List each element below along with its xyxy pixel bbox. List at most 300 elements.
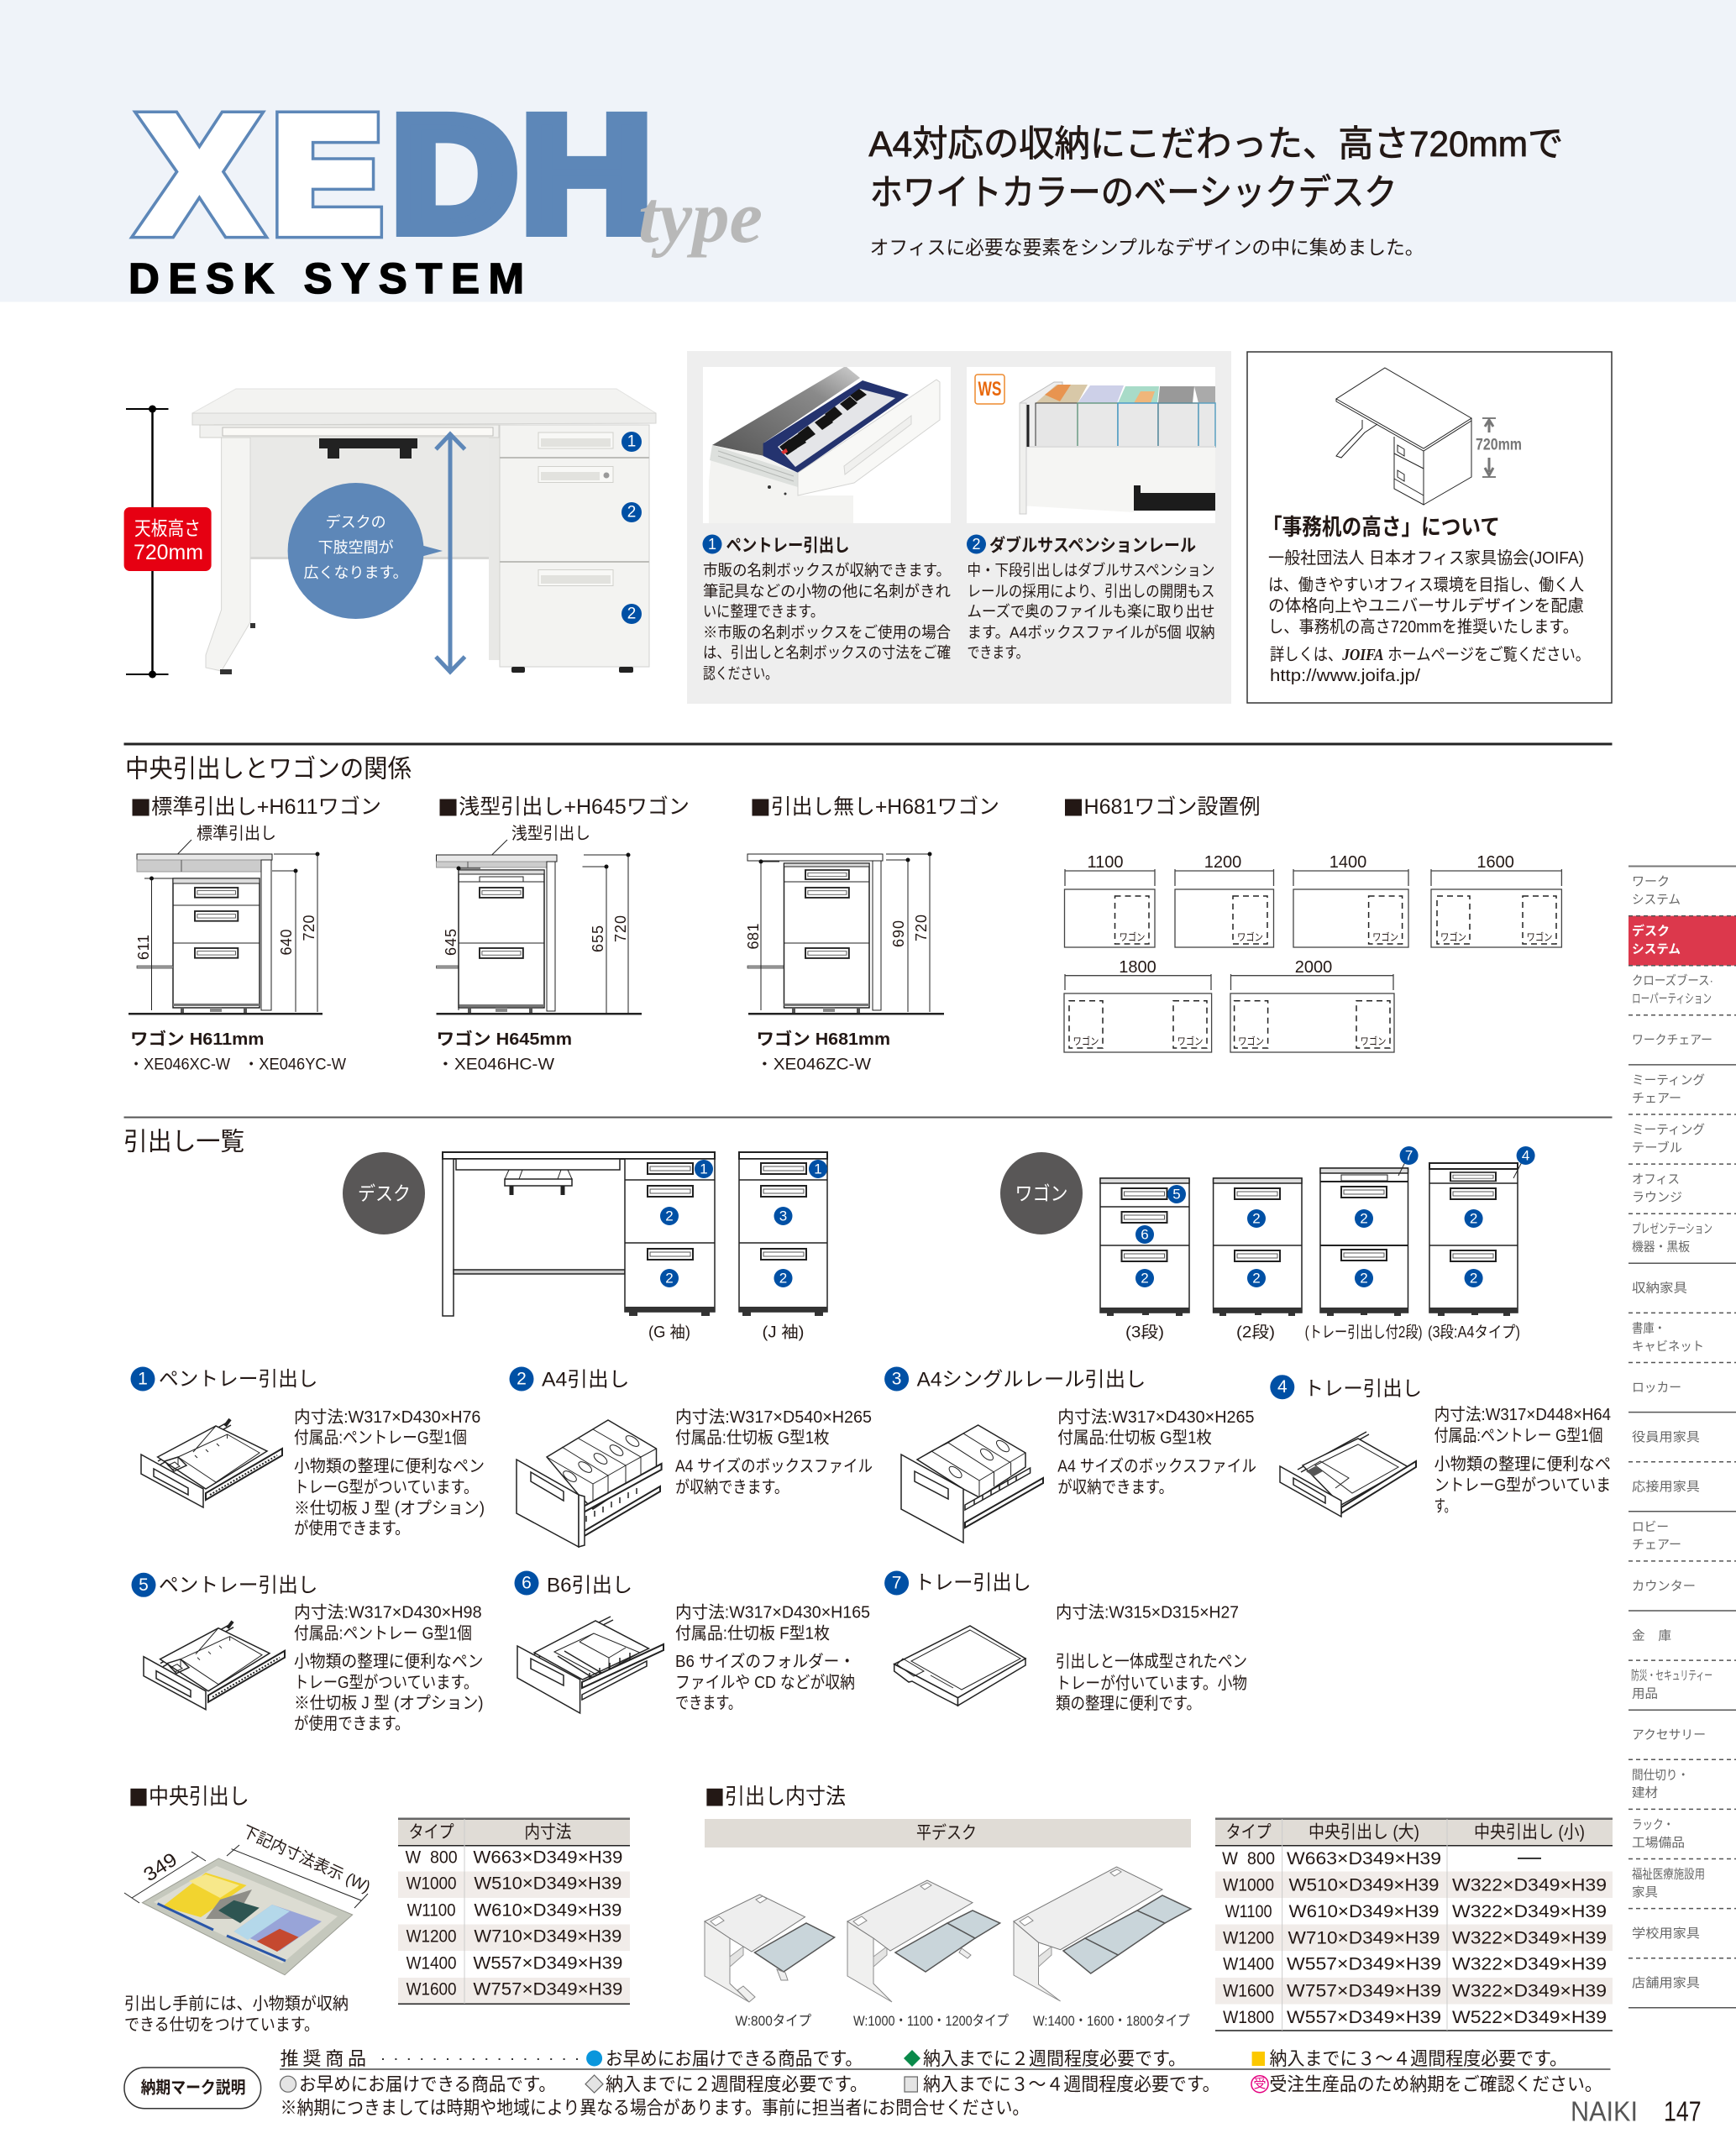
- desk photo badges: 1: [627, 433, 636, 450]
- feature 2: double suspension rail text: ムーズで奥のファイルも楽に取り出せ: [968, 603, 1214, 620]
- badge: WS: [975, 375, 1004, 404]
- table: center drawer inner dimensions: W1200: [406, 1926, 457, 1947]
- table: flat desk inner dimensions: W322×D349×H39: [1452, 1982, 1607, 2000]
- diagram: H681 wagon layout examples: 1100: [1087, 853, 1124, 872]
- feature 1: pen tray text: 1: [708, 536, 716, 553]
- body text: JOIFA: の体格向上やユニバーサルデザインを配慮: [1268, 596, 1584, 616]
- drawer 5: pen tray: 付属品:ペントレー G型1個: [294, 1624, 472, 1643]
- body text: JOIFA: 詳しくは、JOIFA ホームページをご覧ください。: [1270, 645, 1590, 664]
- table: flat desk inner dimensions: W557×D349×H39: [1287, 2008, 1441, 2027]
- footer: page number: 147: [1664, 2096, 1702, 2126]
- desk elevation: J pedestal: 2: [779, 1270, 787, 1287]
- sidebar: category index: ワークチェアー: [1632, 1033, 1712, 1047]
- feature 1: pen tray text: ※市販の名刺ボックスをご使用の場合: [703, 623, 951, 642]
- feature 1: pen tray text: 市販の名刺ボックスが収納できます。: [703, 561, 951, 579]
- sidebar: category index: システム: [1632, 893, 1681, 907]
- drawer 3: A4 single rail: [884, 1367, 1256, 1543]
- label: desk: [343, 1152, 425, 1234]
- subheadings: [130, 792, 1260, 822]
- diagram: H681 wagon layout examples: ワゴン: [1361, 1035, 1386, 1047]
- diagram: H681 wagon layout examples: 1800: [1119, 958, 1156, 977]
- drawer 6: B6: B6 サイズのフォルダー・: [675, 1652, 855, 1671]
- feature 1: pen tray text: いに整理できます。: [703, 603, 824, 620]
- drawer 1: pen tray: トレーG型がついています。: [294, 1478, 478, 1497]
- sidebar: category index: チェアー: [1632, 1091, 1681, 1105]
- diagram: standard drawer + H611 wagon: 標準引出し: [197, 824, 276, 843]
- table: center drawer inner dimensions: W 800: [406, 1848, 458, 1868]
- icon: pen tray drawer: [141, 1419, 282, 1507]
- drawer 1: pen tray: ペントレー引出し: [159, 1368, 317, 1391]
- sidebar: category index: 店舗用家具: [1632, 1976, 1700, 1990]
- sidebar: category index: 書庫・: [1632, 1321, 1665, 1335]
- subheadings: ■H681ワゴン設置例: [1063, 792, 1260, 822]
- dimension: desk height: [124, 405, 212, 679]
- callout bubble: legroom: 広くなります。: [303, 564, 408, 581]
- diagram: shallow drawer + H645 wagon: 645: [443, 929, 459, 956]
- table: flat desk inner dimensions: W510×D349×H39: [1288, 1876, 1440, 1895]
- diagram: H681 wagon layout examples: ワゴン: [1440, 930, 1466, 943]
- subheadings: ■引出し無し+H681ワゴン: [750, 792, 999, 822]
- desk photo badges: 2: [627, 605, 636, 623]
- diagram: H681 wagon layout examples: 1400: [1330, 853, 1366, 872]
- body text: JOIFA: [1268, 548, 1590, 685]
- icon: pen tray drawer: [144, 1622, 285, 1710]
- sidebar: category index: ワーク: [1632, 874, 1670, 888]
- drawer 4: tray: [1270, 1375, 1611, 1517]
- feature 1: pen tray text: 認ください。: [703, 665, 778, 682]
- sidebar: category index: ロッカー: [1632, 1381, 1681, 1395]
- diagram: H681 wagon layout examples: ワゴン: [1177, 1035, 1203, 1047]
- table: flat desk inner dimensions: W1800: [1223, 2008, 1274, 2027]
- title logo: XEDH type: type: [638, 177, 763, 259]
- panel: desk height explanation: [1247, 352, 1612, 703]
- heading: center drawer: ■中央引出し: [128, 1780, 249, 1812]
- wagon: 3 tier A4 type: [1428, 1146, 1535, 1342]
- band: flat desk: [705, 1819, 1191, 1848]
- feature 2: double suspension rail text: ダブルサスペンションレール: [989, 536, 1196, 556]
- icon: isometric desk with 720mm height: 720mm: [1476, 437, 1522, 453]
- wagon: 3 tier A4 type: 2: [1470, 1211, 1477, 1226]
- delivery mark label: 納期マーク説明: [141, 2078, 245, 2098]
- desk elevation: G pedestal: 2: [665, 1270, 674, 1287]
- drawer 3: A4 single rail: 3: [892, 1369, 901, 1389]
- table: flat desk inner dimensions: W663×D349×H39: [1287, 1849, 1441, 1869]
- table: flat desk inner dimensions: W322×D349×H39: [1452, 1955, 1607, 1973]
- caption: wagon H611: [128, 1029, 346, 1073]
- sidebar: category index: 用品: [1632, 1687, 1658, 1701]
- sidebar: category index: 応接用家具: [1632, 1480, 1700, 1494]
- caption: wagon H681: ・XE046ZC-W: [756, 1056, 871, 1073]
- icon: A4 single rail drawer: [901, 1425, 1043, 1543]
- body text: JOIFA: は、働きやすいオフィス環境を目指し、働く人: [1268, 575, 1584, 595]
- drawer 1: pen tray: が使用できます。: [294, 1519, 410, 1538]
- table: center drawer inner dimensions: 内寸法: [524, 1822, 571, 1842]
- diagram: shallow drawer + H645 wagon: 720: [612, 915, 629, 942]
- icon: integrated tray: [894, 1626, 1025, 1706]
- desk elevation: J pedestal: [739, 1152, 827, 1342]
- feature 1: pen tray text: 筆記具などの小物の他に名刺がきれ: [703, 583, 951, 600]
- diagram: standard drawer + H611 wagon: 640: [278, 929, 295, 956]
- delivery legend: 納入までに３～４週間程度必要です。: [1270, 2048, 1567, 2069]
- diagram: H681 wagon layout examples: 1200: [1204, 853, 1241, 872]
- label: desk: デスク: [358, 1182, 411, 1204]
- sidebar: category index: カウンター: [1632, 1579, 1696, 1593]
- delivery legend: ※納期につきましては時期や地域により異なる場合があります。事前に担当者にお問合せください。: [281, 2098, 1029, 2118]
- table: flat desk inner dimensions: W 800: [1222, 1849, 1275, 1869]
- wagon: 2 tier: 2: [1252, 1211, 1261, 1226]
- table: flat desk inner dimensions: W322×D349×H39: [1452, 1902, 1607, 1921]
- table: center drawer inner dimensions: W1100: [407, 1901, 456, 1920]
- sidebar: category index: 収納家具: [1632, 1282, 1687, 1296]
- header headline: ホワイトカラーのベーシックデスク: [870, 173, 1398, 213]
- red label: desk top height: [124, 507, 212, 571]
- table: flat desk inner dimensions: W322×D349×H39: [1452, 1928, 1607, 1948]
- sidebar: category index: ラック・: [1632, 1817, 1674, 1832]
- drawer 6: B6: 6: [522, 1574, 532, 1592]
- drawer 4: tray: す。: [1434, 1497, 1455, 1516]
- drawer 7: tray: トレーが付いています。小物: [1056, 1674, 1247, 1693]
- diagram: H681 wagon layout examples: ワゴン: [1527, 930, 1552, 943]
- drawer 2: A4: 内寸法:W317×D540×H265: [675, 1407, 872, 1427]
- red label: desk top height: 720mm: [134, 541, 203, 564]
- drawer 5: pen tray: ペントレー引出し: [159, 1574, 317, 1597]
- sidebar: category index: オフィス: [1632, 1172, 1680, 1187]
- sidebar: category index: 機器・黒板: [1632, 1240, 1690, 1255]
- sidebar: category index: 工場備品: [1632, 1836, 1685, 1850]
- heading: about desk height: 「事務机の高さ」について: [1262, 515, 1500, 540]
- sidebar: category index: 学校用家具: [1632, 1926, 1700, 1941]
- photo: center drawer tray: 349: [139, 1848, 181, 1885]
- table: flat desk inner dimensions: W1600: [1223, 1982, 1274, 2000]
- caption: wagon H645: [437, 1029, 572, 1073]
- caption: wagon H645: ・XE046HC-W: [437, 1056, 554, 1073]
- table: flat desk inner dimensions: W1000: [1223, 1876, 1274, 1895]
- feature 1: pen tray text: [702, 534, 951, 682]
- panel: drawer features: [687, 351, 1231, 704]
- sidebar: category index: テーブル: [1632, 1140, 1682, 1155]
- wagon: 2 tier: (2段): [1236, 1323, 1275, 1342]
- wagon: 3 tier A4 type: (3段:A4タイプ): [1428, 1323, 1520, 1342]
- drawer 6: B6: B6引出し: [547, 1574, 632, 1597]
- feature 2: double suspension rail text: ます。A4ボックスファイルが5個 収納: [968, 623, 1214, 642]
- desk elevation: G pedestal: 2: [665, 1208, 674, 1224]
- desk illustration: W800: W:800タイプ: [736, 2013, 811, 2029]
- footer: brand: NAIKI: [1571, 2096, 1638, 2126]
- wagon: with tray, 2 tier: 2: [1360, 1211, 1368, 1226]
- desk illustration: W1000/1100/1200: W:1000・1100・1200タイプ: [853, 2013, 1009, 2029]
- diagram: shallow drawer + H645 wagon: 浅型引出し: [511, 824, 590, 843]
- delivery mark label: [124, 2068, 261, 2109]
- wagon: 2 tier: 2: [1252, 1270, 1261, 1287]
- drawer 6: B6: [514, 1570, 870, 1713]
- diagram: H681 wagon layout examples: 1600: [1476, 853, 1514, 872]
- table: center drawer inner dimensions: W610×D349×H39: [474, 1901, 621, 1920]
- section heading: center drawer and wagon relation: 中央引出しとワゴンの関係: [125, 756, 412, 783]
- feature 2: double suspension rail text: レールの採用により、引出しの開閉もス: [968, 583, 1214, 600]
- drawer 5: pen tray: ※仕切板 J 型 (オプション): [294, 1694, 484, 1713]
- sidebar: category index: ミーティング: [1632, 1073, 1705, 1088]
- drawer 5: pen tray: が使用できます。: [294, 1714, 410, 1733]
- diagram: shallow drawer + H645 wagon: [437, 824, 642, 1073]
- band: flat desk: 平デスク: [916, 1824, 977, 1842]
- diagram: no drawer + H681 wagon: [745, 852, 944, 1073]
- photo: center drawer tray: 下記内寸法表示 (W): [239, 1822, 373, 1896]
- callout bubble: legroom: 下肢空間が: [318, 539, 394, 556]
- drawer 7: tray: 類の整理に便利です。: [1056, 1694, 1201, 1713]
- body text: JOIFA: し、事務机の高さ720mmを推奨いたします。: [1268, 617, 1578, 637]
- sidebar: category index: 家具: [1632, 1885, 1658, 1900]
- drawer 1: pen tray: [131, 1367, 485, 1538]
- drawer 2: A4: A4 サイズのボックスファイル: [675, 1457, 873, 1476]
- drawer 2: A4: A4引出し: [542, 1369, 630, 1391]
- drawer 1: pen tray: 小物類の整理に便利なペン: [294, 1457, 485, 1476]
- sidebar: category index: [1628, 867, 1736, 2008]
- table: center drawer inner dimensions: W1400: [406, 1953, 457, 1973]
- desk elevation: G pedestal: [443, 1152, 715, 1342]
- sidebar: category index: クローズブース·: [1632, 973, 1713, 988]
- diagram: H681 wagon layout examples: ワゴン: [1119, 930, 1146, 943]
- drawer 4: tray: 付属品:ペントレー G型1個: [1434, 1426, 1602, 1445]
- drawer 7: tray: 7: [892, 1574, 901, 1592]
- body text: JOIFA: 一般社団法人 日本オフィス家具協会(JOIFA): [1268, 548, 1584, 568]
- delivery legend: お早めにお届けできる商品です。: [606, 2048, 863, 2069]
- icon: tray drawer: [1280, 1432, 1416, 1517]
- photo: center drawer tray: [124, 1822, 373, 1975]
- desk elevation: G pedestal: 1: [700, 1161, 708, 1177]
- drawer 4: tray: 4: [1277, 1377, 1288, 1397]
- sidebar: category index: 間仕切り・: [1632, 1768, 1689, 1782]
- drawer 5: pen tray: [131, 1573, 484, 1733]
- diagram: H681 wagon layout examples: 2000: [1295, 958, 1332, 977]
- drawer 4: tray: 内寸法:W317×D448×H64: [1434, 1405, 1611, 1424]
- label: wagon: [1000, 1152, 1083, 1234]
- title logo: XEDH type: H: [522, 84, 652, 265]
- desk illustration: W1000/1100/1200: [847, 1880, 1009, 2029]
- wagon: with tray, 2 tier: [1305, 1146, 1423, 1342]
- caption: center drawer: できる仕切をつけています。: [124, 2015, 319, 2035]
- diagram: H681 wagon layout examples: [1064, 853, 1561, 1052]
- drawer 1: pen tray: 付属品:ペントレーG型1個: [294, 1428, 467, 1448]
- sidebar: category index: ロビー: [1632, 1520, 1669, 1534]
- desk elevation: J pedestal: (J 袖): [763, 1323, 805, 1342]
- feature 2: double suspension rail text: [967, 534, 1214, 662]
- table: flat desk inner dimensions: W322×D349×H39: [1452, 1876, 1607, 1895]
- icon: A4 drawer with dividers: [517, 1420, 662, 1547]
- caption: wagon H645: ワゴン H645mm: [437, 1029, 572, 1049]
- wagon: 3 tier: (3段): [1125, 1323, 1164, 1342]
- desk illustration: W1400/1600/1800: W:1400・1600・1800タイプ: [1033, 2013, 1190, 2029]
- delivery legend: 受: [1253, 2077, 1267, 2091]
- drawer 3: A4 single rail: A4 サイズのボックスファイル: [1057, 1457, 1256, 1476]
- sidebar: category index: 建材: [1632, 1786, 1658, 1800]
- header description: オフィスに必要な要素をシンプルなデザインの中に集めました。: [870, 237, 1424, 259]
- caption: center drawer: 引出し手前には、小物類が収納: [124, 1994, 349, 2014]
- drawer 3: A4 single rail: A4シングルレール引出し: [917, 1369, 1146, 1391]
- diagram: no drawer + H681 wagon: 681: [745, 924, 762, 949]
- delivery legend: 納入までに３～４週間程度必要です。: [923, 2074, 1220, 2094]
- drawer 3: A4 single rail: 付属品:仕切板 G型1枚: [1057, 1428, 1212, 1448]
- section divider: [124, 742, 1613, 746]
- header headline: A4対応の収納にこだわった、高さ720mmで: [868, 124, 1563, 165]
- feature 2: double suspension rail text: 中・下段引出しはダブルサスペンション: [968, 561, 1214, 579]
- icon: isometric desk with 720mm height: [1336, 368, 1522, 505]
- badge: WS: WS: [978, 378, 1001, 401]
- drawer 6: B6: ファイルや CD などが収納: [675, 1673, 855, 1692]
- diagram: standard drawer + H611 wagon: 720: [301, 915, 317, 941]
- diagram: H681 wagon layout examples: ワゴン: [1238, 1035, 1264, 1047]
- sidebar: category index: 金 庫: [1632, 1628, 1671, 1643]
- desk illustration: W800: [705, 1895, 835, 2029]
- delivery legend: [280, 2048, 1611, 2118]
- table: center drawer inner dimensions: タイプ: [409, 1822, 454, 1842]
- section divider: [124, 1117, 1613, 1119]
- desk elevation: G pedestal: (G 袖): [648, 1323, 690, 1342]
- delivery legend: 推奨商品: [281, 2048, 366, 2069]
- caption: wagon H681: ワゴン H681mm: [756, 1029, 890, 1049]
- sidebar: category index: 役員用家具: [1632, 1430, 1700, 1444]
- title logo: XEDH type: E: [272, 82, 382, 266]
- drawer 7: tray: [884, 1570, 1247, 1713]
- drawer 4: tray: 小物類の整理に便利なペ: [1434, 1455, 1611, 1474]
- diagram: no drawer + H681 wagon: 720: [913, 915, 930, 941]
- red label: desk top height: 天板高さ: [134, 517, 201, 539]
- drawer 2: A4: 付属品:仕切板 G型1枚: [675, 1428, 830, 1448]
- table: flat desk inner dimensions: W610×D349×H39: [1288, 1902, 1440, 1921]
- sidebar: category index: アクセサリー: [1632, 1728, 1706, 1743]
- table: flat desk inner dimensions: タイプ: [1226, 1822, 1272, 1842]
- callout bubble: legroom: [288, 483, 443, 619]
- subheadings: ■浅型引出し+H645ワゴン: [438, 792, 690, 822]
- delivery legend: お早めにお届けできる商品です。: [299, 2074, 556, 2094]
- title logo: XEDH type: X: [142, 83, 257, 266]
- delivery legend: 受注生産品のため納期をご確認ください。: [1270, 2074, 1602, 2094]
- drawer 4: tray: ントレーG型がついていま: [1434, 1475, 1611, 1495]
- drawer 6: B6: 内寸法:W317×D430×H165: [675, 1603, 870, 1622]
- drawer 1: pen tray: 内寸法:W317×D430×H76: [294, 1407, 480, 1427]
- table: center drawer inner dimensions: [398, 1817, 630, 2005]
- diagram: H681 wagon layout examples: ワゴン: [1372, 930, 1398, 943]
- feature 2: double suspension rail text: できます。: [968, 643, 1028, 662]
- table: center drawer inner dimensions: W510×D349×H39: [474, 1874, 621, 1893]
- table: center drawer inner dimensions: W1000: [406, 1874, 457, 1893]
- feature 2: double suspension rail text: 2: [972, 536, 981, 553]
- delivery legend: 納入までに２週間程度必要です。: [923, 2048, 1186, 2069]
- desk illustration: W1400/1600/1800: [1014, 1867, 1191, 2029]
- table: flat desk inner dimensions: 中央引出し (大): [1309, 1822, 1419, 1842]
- icon: B6 drawer: [517, 1617, 663, 1713]
- sidebar: category index: システム: [1632, 942, 1681, 957]
- table: flat desk inner dimensions: W1400: [1223, 1955, 1274, 1973]
- table: flat desk inner dimensions: [1215, 1817, 1613, 2031]
- drawer 3: A4 single rail: 内寸法:W317×D430×H265: [1057, 1407, 1255, 1427]
- wagon: with tray, 2 tier: (トレー引出し付2段): [1305, 1323, 1423, 1342]
- wagon: with tray, 2 tier: 7: [1405, 1147, 1413, 1164]
- table: flat desk inner dimensions: W1100: [1225, 1902, 1272, 1921]
- desk photo: [192, 389, 656, 674]
- diagram: standard drawer + H611 wagon: [128, 824, 346, 1073]
- feature 1: pen tray text: ペントレー引出し: [726, 536, 850, 556]
- header headline: [868, 124, 1563, 213]
- diagram: shallow drawer + H645 wagon: 655: [590, 925, 606, 952]
- drawer 7: tray: 内寸法:W315×D315×H27: [1056, 1603, 1239, 1622]
- desk photo badges: 2: [627, 504, 636, 521]
- drawer 6: B6: 付属品:仕切板 F型1枚: [675, 1624, 830, 1643]
- wagon: with tray, 2 tier: 2: [1360, 1270, 1368, 1287]
- table: center drawer inner dimensions: W557×D349×H39: [473, 1953, 622, 1973]
- table: center drawer inner dimensions: W1600: [406, 1980, 457, 1999]
- desk elevation: J pedestal: 1: [814, 1161, 822, 1177]
- photo: double suspension rail drawer: [967, 367, 1215, 523]
- wagon: 2 tier: [1214, 1178, 1302, 1342]
- drawer 2: A4: が収納できます。: [675, 1478, 789, 1497]
- table: center drawer inner dimensions: W710×D349×H39: [474, 1926, 621, 1947]
- drawer 5: pen tray: 内寸法:W317×D430×H98: [294, 1603, 482, 1622]
- table: flat desk inner dimensions: W557×D349×H39: [1287, 1955, 1441, 1973]
- drawer 7: tray: 引出しと一体成型されたペン: [1056, 1652, 1247, 1671]
- caption: wagon H681: [756, 1029, 890, 1073]
- drawer 2: A4: 2: [517, 1369, 527, 1389]
- caption: wagon H611: ・XE046XC-W: [128, 1056, 230, 1073]
- subtitle: DESK SYSTEM: DESK SYSTEM: [128, 254, 524, 302]
- caption: center drawer: [124, 1994, 349, 2035]
- sidebar: category index: 福祉医療施設用: [1632, 1867, 1705, 1881]
- sidebar: category index: チェアー: [1632, 1538, 1681, 1552]
- drawer 3: A4 single rail: が収納できます。: [1057, 1478, 1173, 1497]
- drawer 4: tray: トレー引出し: [1304, 1377, 1422, 1401]
- drawer 2: A4: [509, 1367, 873, 1547]
- table: flat desk inner dimensions: 中央引出し (小): [1474, 1822, 1585, 1842]
- callout bubble: legroom: デスクの: [326, 514, 386, 531]
- table: flat desk inner dimensions: W757×D349×H39: [1287, 1982, 1441, 2000]
- table: flat desk inner dimensions: W1200: [1223, 1928, 1274, 1948]
- wagon: 3 tier: 6: [1141, 1226, 1149, 1243]
- diagram: no drawer + H681 wagon: 690: [890, 920, 907, 947]
- wagon: 3 tier: 5: [1172, 1186, 1181, 1203]
- sidebar: category index: ミーティング: [1632, 1123, 1705, 1137]
- photo: pen tray drawer: [703, 367, 951, 523]
- table: center drawer inner dimensions: W663×D349×H39: [473, 1848, 622, 1868]
- drawer 5: pen tray: トレーG型がついています。: [294, 1673, 478, 1692]
- legroom double arrow: [436, 434, 465, 672]
- header band: [0, 0, 1736, 302]
- drawer 1: pen tray: 1: [138, 1369, 148, 1389]
- heading: drawer inner dimensions: ■引出し内寸法: [705, 1780, 846, 1812]
- title logo: XEDH type: X: [142, 83, 257, 266]
- sidebar: category index: デスク: [1632, 924, 1670, 939]
- diagram: H681 wagon layout examples: ワゴン: [1073, 1035, 1099, 1047]
- drawer 6: B6: できます。: [675, 1695, 742, 1713]
- subheadings: ■標準引出し+H611ワゴン: [130, 792, 381, 822]
- diagram: H681 wagon layout examples: ワゴン: [1237, 930, 1263, 943]
- table: flat desk inner dimensions: W710×D349×H39: [1288, 1928, 1440, 1948]
- caption: wagon H611: ・XE046YC-W: [244, 1056, 346, 1073]
- wagon: 3 tier: 2: [1141, 1270, 1149, 1287]
- wagon: 3 tier A4 type: 4: [1522, 1147, 1529, 1164]
- drawer 5: pen tray: 5: [139, 1575, 149, 1595]
- diagram: standard drawer + H611 wagon: 611: [135, 935, 152, 960]
- drawer 1: pen tray: ※仕切板 J 型 (オプション): [294, 1499, 485, 1518]
- desk photo badges: [621, 432, 642, 624]
- body text: JOIFA: http://www.joifa.jp/: [1270, 667, 1420, 685]
- caption: wagon H611: ワゴン H611mm: [130, 1029, 264, 1049]
- title logo: XEDH type: [142, 82, 763, 266]
- wagon: 3 tier: [1100, 1178, 1189, 1342]
- wagon: 3 tier A4 type: 2: [1470, 1270, 1477, 1287]
- table: flat desk inner dimensions: W522×D349×H39: [1452, 2008, 1607, 2027]
- drawer 7: tray: トレー引出し: [915, 1572, 1031, 1594]
- section heading: drawer list: 引出し一覧: [123, 1129, 244, 1156]
- delivery legend: 納入までに２週間程度必要です。: [606, 2074, 868, 2094]
